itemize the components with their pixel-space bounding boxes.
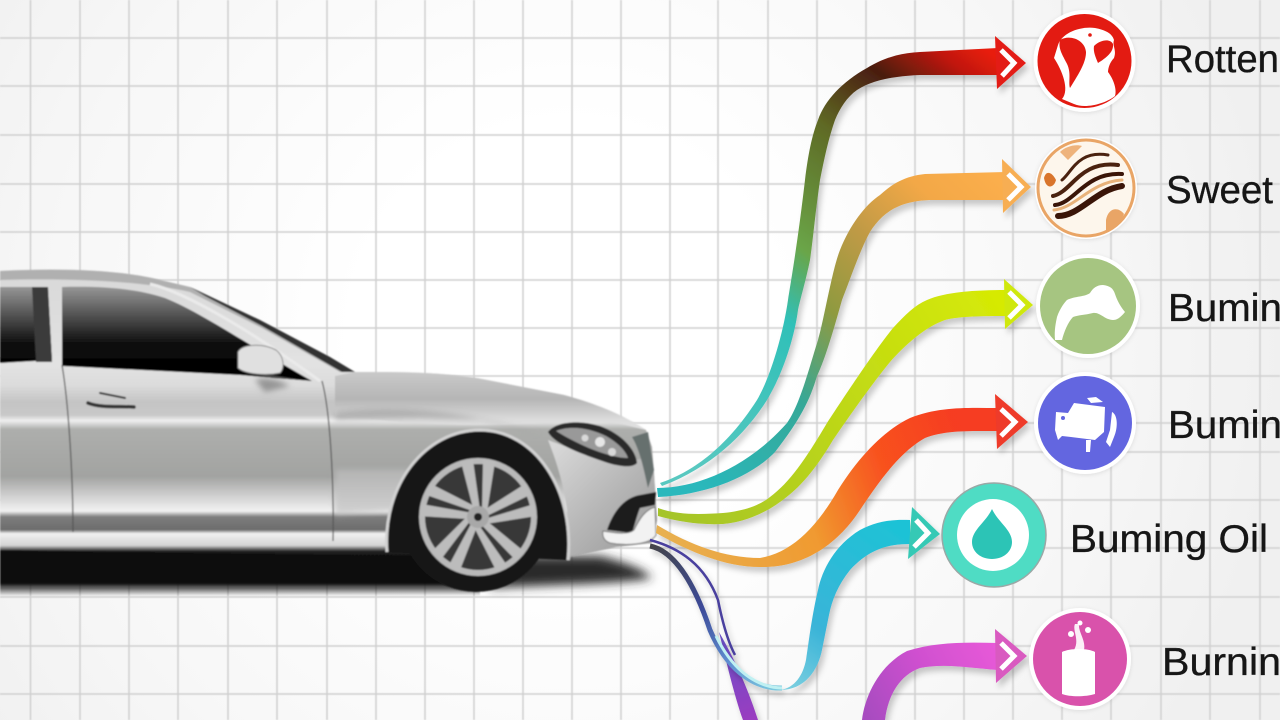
icon: burning smoke <box>1036 254 1140 358</box>
door handle <box>88 393 134 407</box>
arrowhead: orange <box>1002 159 1031 213</box>
body highlight shapes <box>255 378 540 515</box>
icon: burning container <box>1029 608 1131 710</box>
label: Bumin row 4: Bumin <box>1168 404 1280 447</box>
front nose <box>548 440 657 557</box>
ribbon: magenta arrow <box>862 629 1027 720</box>
ribbon: rotten to red arrow <box>660 36 1026 486</box>
icon: oil drop <box>942 483 1046 587</box>
front wheel <box>400 440 552 592</box>
window glass <box>0 287 312 381</box>
roof edge <box>0 270 355 372</box>
arrowhead: red <box>995 36 1026 89</box>
label: Sweet: Sweet <box>1166 169 1273 212</box>
label: Rotten: Rotten <box>1166 38 1279 81</box>
arrowhead: teal <box>908 507 940 559</box>
arrowhead: magenta <box>995 629 1027 683</box>
arrowhead: red-orange <box>995 394 1028 449</box>
pillar <box>32 287 52 362</box>
ribbon: blue to cyan arrow <box>650 507 940 690</box>
arrowhead: lime <box>1004 279 1033 329</box>
icon: rotten egg <box>1034 10 1136 112</box>
label: Burnin: Burnin <box>1162 641 1280 684</box>
ground shadow <box>0 548 652 596</box>
hood <box>335 372 646 430</box>
grille <box>632 432 654 488</box>
label: Buming Oil: Buming Oil <box>1070 518 1268 561</box>
bumper intake <box>603 492 656 544</box>
icon: engine <box>1034 372 1136 474</box>
ribbon: lime arrow <box>658 279 1033 524</box>
a-pillar dark trim <box>190 287 355 372</box>
icon: sweet swirl <box>1035 137 1137 239</box>
car body <box>0 270 657 557</box>
ribbon: sweet to orange arrow <box>657 159 1031 497</box>
door lines <box>62 365 333 541</box>
headlight <box>548 422 637 466</box>
ribbon: orange-red arrow <box>656 394 1028 567</box>
ribbon: purple off bottom <box>650 540 758 720</box>
car <box>0 270 657 596</box>
side mirror <box>238 345 302 380</box>
label: Bumin row 3: Bumin <box>1168 287 1280 330</box>
wheel arch <box>387 430 569 560</box>
window chrome <box>150 284 320 381</box>
